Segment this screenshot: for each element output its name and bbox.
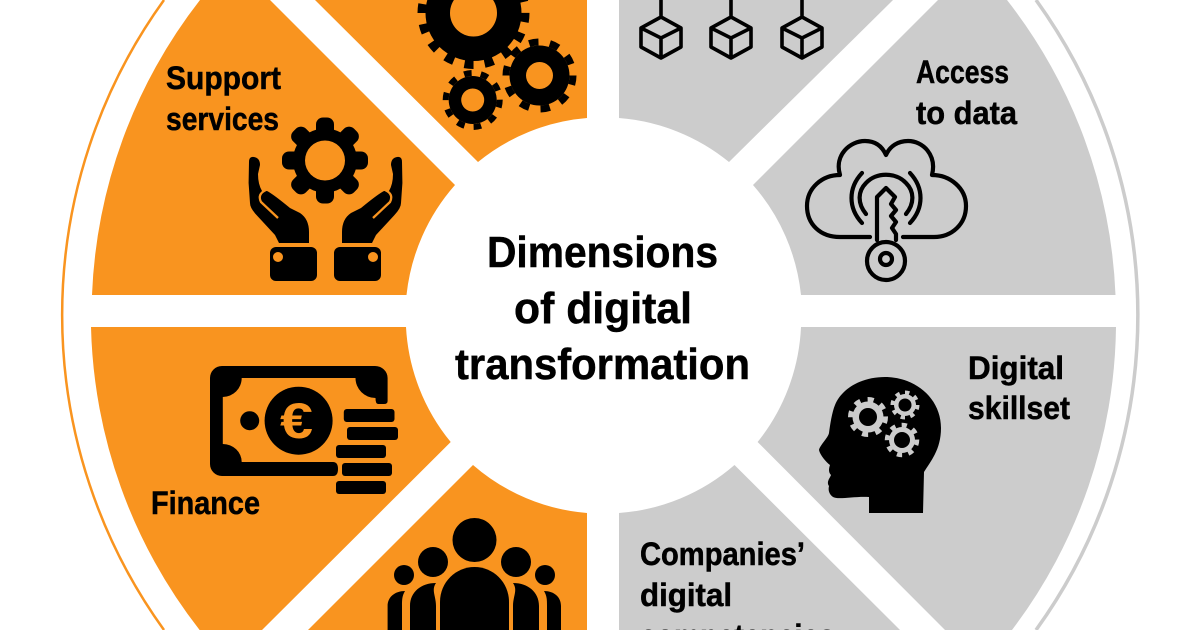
- label: support services: Support: [166, 60, 281, 96]
- icon: cloud with key: [807, 141, 966, 280]
- label: access to data: to data: [916, 95, 1017, 131]
- small gear: [446, 73, 500, 127]
- panel: companies' digital competencies: [619, 465, 900, 630]
- title: Dimensions: [487, 228, 718, 277]
- panel: people: [308, 465, 587, 630]
- icon: hanging cubes: [641, 0, 822, 58]
- label: companies' digital competencies: [640, 536, 835, 630]
- icon: group of people: [388, 518, 561, 630]
- label: access to data: Access: [916, 54, 1009, 90]
- label: companies' digital competencies: Companies’: [640, 536, 805, 572]
- label: digital skillset: [968, 350, 1070, 426]
- wedge: people: [308, 465, 587, 630]
- icon: euro banknote in hand: [210, 366, 398, 494]
- title: [455, 228, 750, 389]
- icon: three gears: [422, 0, 573, 127]
- big gear: [422, 0, 525, 64]
- right hand: [334, 157, 402, 281]
- label: support services: services: [166, 101, 279, 137]
- label: digital skillset: Digital: [968, 350, 1064, 386]
- label: support services: [166, 60, 281, 137]
- title: of digital: [514, 284, 692, 333]
- gear: [282, 118, 368, 204]
- left hand: [249, 157, 317, 281]
- panel: support services: [92, 0, 455, 295]
- wedge: digital skillset: [758, 327, 1116, 630]
- label: digital skillset: skillset: [968, 390, 1070, 426]
- label: companies' digital competencies: digital: [640, 577, 732, 613]
- label: finance: Finance: [151, 485, 260, 521]
- wedge: access to data: [753, 0, 1116, 295]
- icon: hands holding gear: [249, 118, 402, 281]
- right gear: [506, 42, 573, 109]
- wedge: support services: [92, 0, 455, 295]
- panel: infrastructure cubes: [619, 0, 893, 162]
- panel: technology gears: [315, 0, 587, 162]
- wedge: companies' digital competencies: [619, 465, 900, 630]
- outer ring: grey right half: [1036, 0, 1138, 630]
- panel: access to data: [753, 0, 1116, 295]
- icon: euro banknote in hand: €: [280, 393, 313, 449]
- title: transformation: [455, 340, 750, 389]
- panel: digital skillset: [758, 327, 1116, 630]
- panel: finance: [91, 327, 451, 630]
- label: access to data: [916, 54, 1017, 131]
- wedge: cubes: [619, 0, 893, 162]
- icon: head with gears: [819, 377, 941, 513]
- wedge: gears: [315, 0, 587, 162]
- wedge: finance: [91, 327, 451, 630]
- outer ring: orange left half: [62, 0, 164, 630]
